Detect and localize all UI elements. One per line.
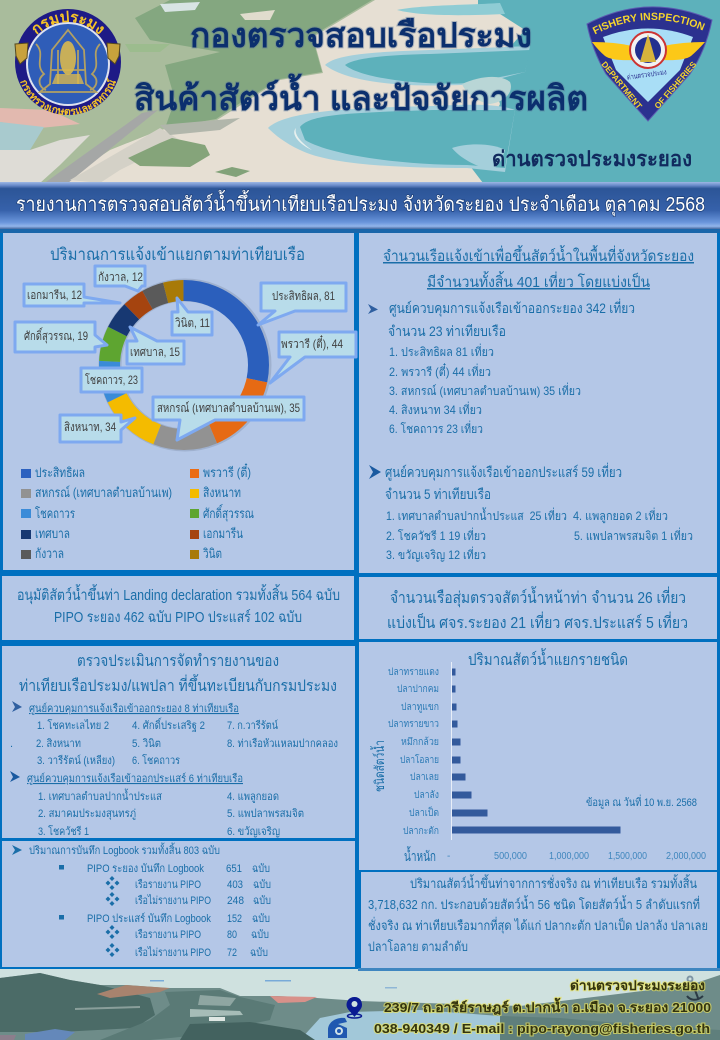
header banner: beach aerial photo <box>0 0 720 183</box>
Prasae centre list: 2. โชควัชรี 1 19 เที่ยว <box>386 527 486 543</box>
y axis title: ชนิดสัตว์น้ำ <box>370 740 387 792</box>
footer: harbour photo <box>0 968 720 1040</box>
legend: เทศบาล <box>35 526 70 541</box>
Rayong centre list: 6. โชคถาวร 23 เที่ยว <box>389 420 483 436</box>
callout labels: พรวารี (ตี๋), 44 <box>281 334 343 351</box>
panel: landing declaration: อนุมัติสัตว์น้ำขึ้นท่า Landing declaration รวมทั้งสิ้น 564 ฉบับ <box>17 584 340 605</box>
x axis <box>404 846 706 864</box>
PIPO Prasae rows: 152 <box>227 913 242 925</box>
x axis: 500,000 <box>494 851 527 862</box>
species labels: ปลาโอลาย <box>400 753 439 766</box>
Rayong ports: 4. ศักดิ์ประเสริฐ 2 <box>132 717 205 732</box>
PIPO Prasae rows: PIPO ประแสร์ บันทึก Logbook <box>87 912 211 925</box>
species labels: หมึกกล้วย <box>401 736 439 748</box>
legend: ประสิทธิผล <box>35 465 85 480</box>
species labels: ปลาปากคม <box>397 684 439 695</box>
callout labels <box>24 270 343 434</box>
report title bar <box>0 182 720 229</box>
panel: species bar chart <box>359 642 717 870</box>
panel: port registration assessment: ท่าเทียบเรือประมง/แพปลา ที่ขึ้นทะเบียนกับกรมประมง <box>19 674 337 695</box>
PIPO Rayong rows: PIPO ระยอง บันทึก Logbook <box>87 863 204 875</box>
callout labels: ประสิทธิผล, 81 <box>272 289 335 303</box>
panel: vessel arrivals summary <box>359 233 717 573</box>
Prasae centre list: 4. แพลูกยอด 2 เที่ยว <box>573 507 668 524</box>
PIPO Prasae rows: ฉบับ <box>251 929 269 941</box>
Rayong ports <box>10 702 338 767</box>
legend: พรวารี (ตี๋) <box>203 463 251 480</box>
Rayong ports: . <box>10 738 13 750</box>
panel: logbook records <box>2 841 355 967</box>
species labels: ปลากะตัก <box>403 826 439 837</box>
panel: declarations by port (donut) <box>3 233 356 570</box>
Rayong ports: 1. โชคทะเลไทย 2 <box>37 718 109 732</box>
Rayong centre list: จำนวน 23 ท่าเทียบเรือ <box>388 323 506 339</box>
species labels <box>388 667 439 837</box>
Prasae ports: 2. สมาคมประมงสุนทรภู่ <box>38 808 136 820</box>
logo: Fishery Inspection shield: DEPARTMENT <box>601 61 642 108</box>
axis line <box>451 662 452 840</box>
Prasae ports: 3. โชควัชรี 1 <box>38 824 89 838</box>
bars <box>452 668 620 834</box>
icon: anchor <box>687 976 703 1000</box>
panel: landing declaration: PIPO ระยอง 462 ฉบับ PIPO ประแสร์ 102 ฉบับ <box>54 609 302 626</box>
Rayong centre list: 4. สิงหนาท 34 เที่ยว <box>389 401 482 417</box>
data date note: ข้อมูล ณ วันที่ 10 พ.ย. 2568 <box>586 794 697 809</box>
legend: ศักดิ์สุวรรณ <box>203 504 254 522</box>
panel: landing declaration <box>2 576 354 640</box>
logo: Department of Fisheries seal <box>14 9 121 116</box>
species labels: ปลาเลย <box>410 772 439 783</box>
Prasae ports: 6. ขวัญเจริญ <box>227 826 280 838</box>
PIPO Rayong rows: 248 <box>227 895 244 907</box>
callout labels: กังวาล, 12 <box>98 270 143 284</box>
legend: วินิต <box>202 546 222 561</box>
callout labels: เทศบาล, 15 <box>130 345 180 359</box>
panel heading: จำนวนเรือแจ้งเข้าเพื่อขึ้นสัตว์น้ำในพื้นที่จังหวัดระยอง <box>383 245 694 265</box>
title: inspection division: กองตรวจสอบเรือประมง <box>190 17 532 55</box>
PIPO Rayong rows: 651 <box>226 863 242 875</box>
chart title: ปริมาณสัตว์น้ำแยกรายชนิด <box>468 648 628 669</box>
PIPO Prasae rows <box>59 912 270 959</box>
species labels: ปลาลัง <box>414 790 439 801</box>
PIPO Rayong rows: ฉบับ <box>253 895 271 907</box>
Prasae ports: 4. แพลูกยอด <box>227 791 279 803</box>
Rayong ports: 3. วารีรัตน์ (เหลียง) <box>37 754 115 767</box>
logo: Department of Fisheries seal: กรมประมง <box>32 10 104 34</box>
legend <box>21 463 254 561</box>
Rayong centre list: ศูนย์ควบคุมการแจ้งเรือเข้าออกระยอง 342 เที่ยว <box>389 299 635 317</box>
PIPO Rayong rows: ฉบับ <box>252 863 270 875</box>
legend: เอกมารีน <box>203 526 243 541</box>
Rayong centre list: 1. ประสิทธิผล 81 เที่ยว <box>389 343 494 359</box>
logo: Fishery Inspection shield: OF FISHERIES <box>655 62 696 108</box>
icon: arrow bullet <box>368 304 378 314</box>
Rayong ports: 5. วินิต <box>132 738 161 750</box>
icon: arrow bullet <box>369 465 381 479</box>
PIPO Prasae rows: 80 <box>227 929 237 941</box>
footer text: office name: ด่านตรวจประมงระยอง <box>570 978 705 993</box>
Rayong ports: 6. โชคถาวร <box>132 753 180 767</box>
Rayong centre list <box>388 299 635 436</box>
footer text: contact: 038-940349 / E-mail : pipo-rayong@fisheries.go.th <box>374 1021 710 1036</box>
Prasae ports: ศูนย์ควบคุมการแจ้งเรือเข้าออกประแสร์ 6 ท่าเทียบเรือ <box>27 772 243 785</box>
callouts <box>15 266 356 442</box>
Prasae centre list: จำนวน 5 ท่าเทียบเรือ <box>385 486 491 502</box>
x axis: 1,000,000 <box>549 851 589 862</box>
chart title: ปริมาณการแจ้งเข้าแยกตามท่าเทียบเรือ <box>50 245 305 264</box>
PIPO Prasae rows: ฉบับ <box>252 913 270 925</box>
PIPO Rayong rows: เรือไม่รายงาน PIPO <box>135 894 211 907</box>
donut chart <box>110 290 260 440</box>
panel: vessel arrivals summary: มีจำนวนทั้งสิ้น 401 เที่ยว โดยแบ่งเป็น <box>427 271 650 291</box>
PIPO Rayong rows <box>59 863 271 907</box>
icon: arrow bullet <box>12 701 22 712</box>
icon: arrow bullet <box>12 845 22 855</box>
PIPO Prasae rows: เรือไม่รายงาน PIPO <box>135 946 211 959</box>
footer text: address: 239/7 ถ.อารีย์ราษฎร์ ต.ปากน้ำ อ.เมือง จ.ระยอง 21000 <box>384 997 711 1016</box>
PIPO Rayong rows: ฉบับ <box>253 879 271 891</box>
callout labels: เอกมารีน, 12 <box>27 288 82 302</box>
logo: Fishery Inspection shield: ด่านตรวจประมง <box>626 67 667 82</box>
logo: Department of Fisheries seal: กระทรวงเกษตรและสหกรณ์ <box>20 78 116 116</box>
PIPO Rayong rows: 403 <box>227 879 243 891</box>
panel: port registration assessment <box>2 646 355 838</box>
heading: ตรวจประเมินการจัดทำรายงานของ <box>77 653 279 670</box>
logo: Fishery Inspection shield <box>586 6 712 122</box>
icon: map pin <box>346 997 362 1018</box>
logo: Fishery Inspection shield: FISHERY INSPECTION <box>592 12 705 34</box>
Rayong ports: 8. ท่าเรือหัวแหลมปากคลอง <box>227 737 338 750</box>
Prasae centre list: 3. ขวัญเจริญ 12 เที่ยว <box>386 546 486 562</box>
panel: random inspections: แบ่งเป็น ศจร.ระยอง 21 เที่ยว ศจร.ประแสร์ 5 เที่ยว <box>387 611 688 632</box>
Rayong ports: 2. สิงหนาท <box>36 738 81 750</box>
Prasae ports <box>27 772 304 838</box>
x axis: 1,500,000 <box>608 851 647 862</box>
Prasae centre list: ศูนย์ควบคุมการแจ้งเรือเข้าออกประแสร์ 59 เที่ยว <box>385 463 622 481</box>
species labels: ปลาทูแขก <box>401 702 439 713</box>
callout labels: สหกรณ์ (เทศบาลตำบลบ้านเพ), 35 <box>157 401 300 415</box>
Prasae centre list: 1. เทศบาลตำบลปากน้ำประแส 25 เที่ยว <box>386 507 567 523</box>
PIPO Prasae rows: ฉบับ <box>250 947 268 959</box>
PIPO Rayong rows: เรือรายงาน PIPO <box>135 878 201 891</box>
icon: arrow bullet <box>10 771 20 782</box>
callout labels: ศักดิ์สุวรรณ, 19 <box>24 327 88 344</box>
Prasae centre list: 5. แพปลาพรสมจิต 1 เที่ยว <box>574 527 693 543</box>
Prasae ports: 5. แพปลาพรสมจิต <box>227 808 304 820</box>
PIPO Prasae rows: เรือรายงาน PIPO <box>135 928 201 941</box>
icon: telephone <box>328 1018 347 1038</box>
species labels: ปลาทรายแดง <box>388 667 439 678</box>
Rayong ports: ศูนย์ควบคุมการแจ้งเรือเข้าออกระยอง 8 ท่าเทียบเรือ <box>29 702 239 715</box>
panel: total catch summary: ปลาโอลาย ตามลำดับ <box>368 939 468 954</box>
PIPO Prasae rows: 72 <box>227 947 237 959</box>
legend: สิงหนาท <box>203 485 241 500</box>
callout labels: สิงหนาท, 34 <box>64 420 116 434</box>
title: aquatic products line: สินค้าสัตว์น้ำ และปัจจัยการผลิต <box>134 73 588 118</box>
Rayong ports: 7. ก.วารีรัตน์ <box>227 719 278 732</box>
Prasae centre list <box>385 463 693 562</box>
Rayong centre list: 3. สหกรณ์ (เทศบาลตำบลบ้านเพ) 35 เที่ยว <box>389 382 581 398</box>
Prasae ports: 1. เทศบาลตำบลปากน้ำประแส <box>38 788 162 803</box>
x axis: 2,000,000 <box>666 851 706 862</box>
panel: random inspections <box>359 577 717 639</box>
legend: กังวาล <box>35 546 64 561</box>
callout labels: โชคถาวร, 23 <box>85 373 138 387</box>
species labels: ปลาเป็ด <box>409 805 439 819</box>
species labels: ปลาทรายขาว <box>388 719 439 730</box>
subtitle: Rayong checkpoint: ด่านตรวจประมงระยอง <box>492 148 692 171</box>
legend: โชคถาวร <box>35 506 75 521</box>
legend: สหกรณ์ (เทศบาลตำบลบ้านเพ) <box>35 485 172 500</box>
panel: total catch summary <box>361 872 717 968</box>
x axis: น้ำหนัก <box>404 846 436 864</box>
Rayong centre list: 2. พรวารี (ตี๋) 44 เที่ยว <box>389 362 491 379</box>
panel: logbook records: ปริมาณการบันทึก Logbook รวมทั้งสิ้น 803 ฉบับ <box>29 842 220 857</box>
x axis: - <box>447 851 450 862</box>
callout labels: วินิต, 11 <box>175 316 210 330</box>
